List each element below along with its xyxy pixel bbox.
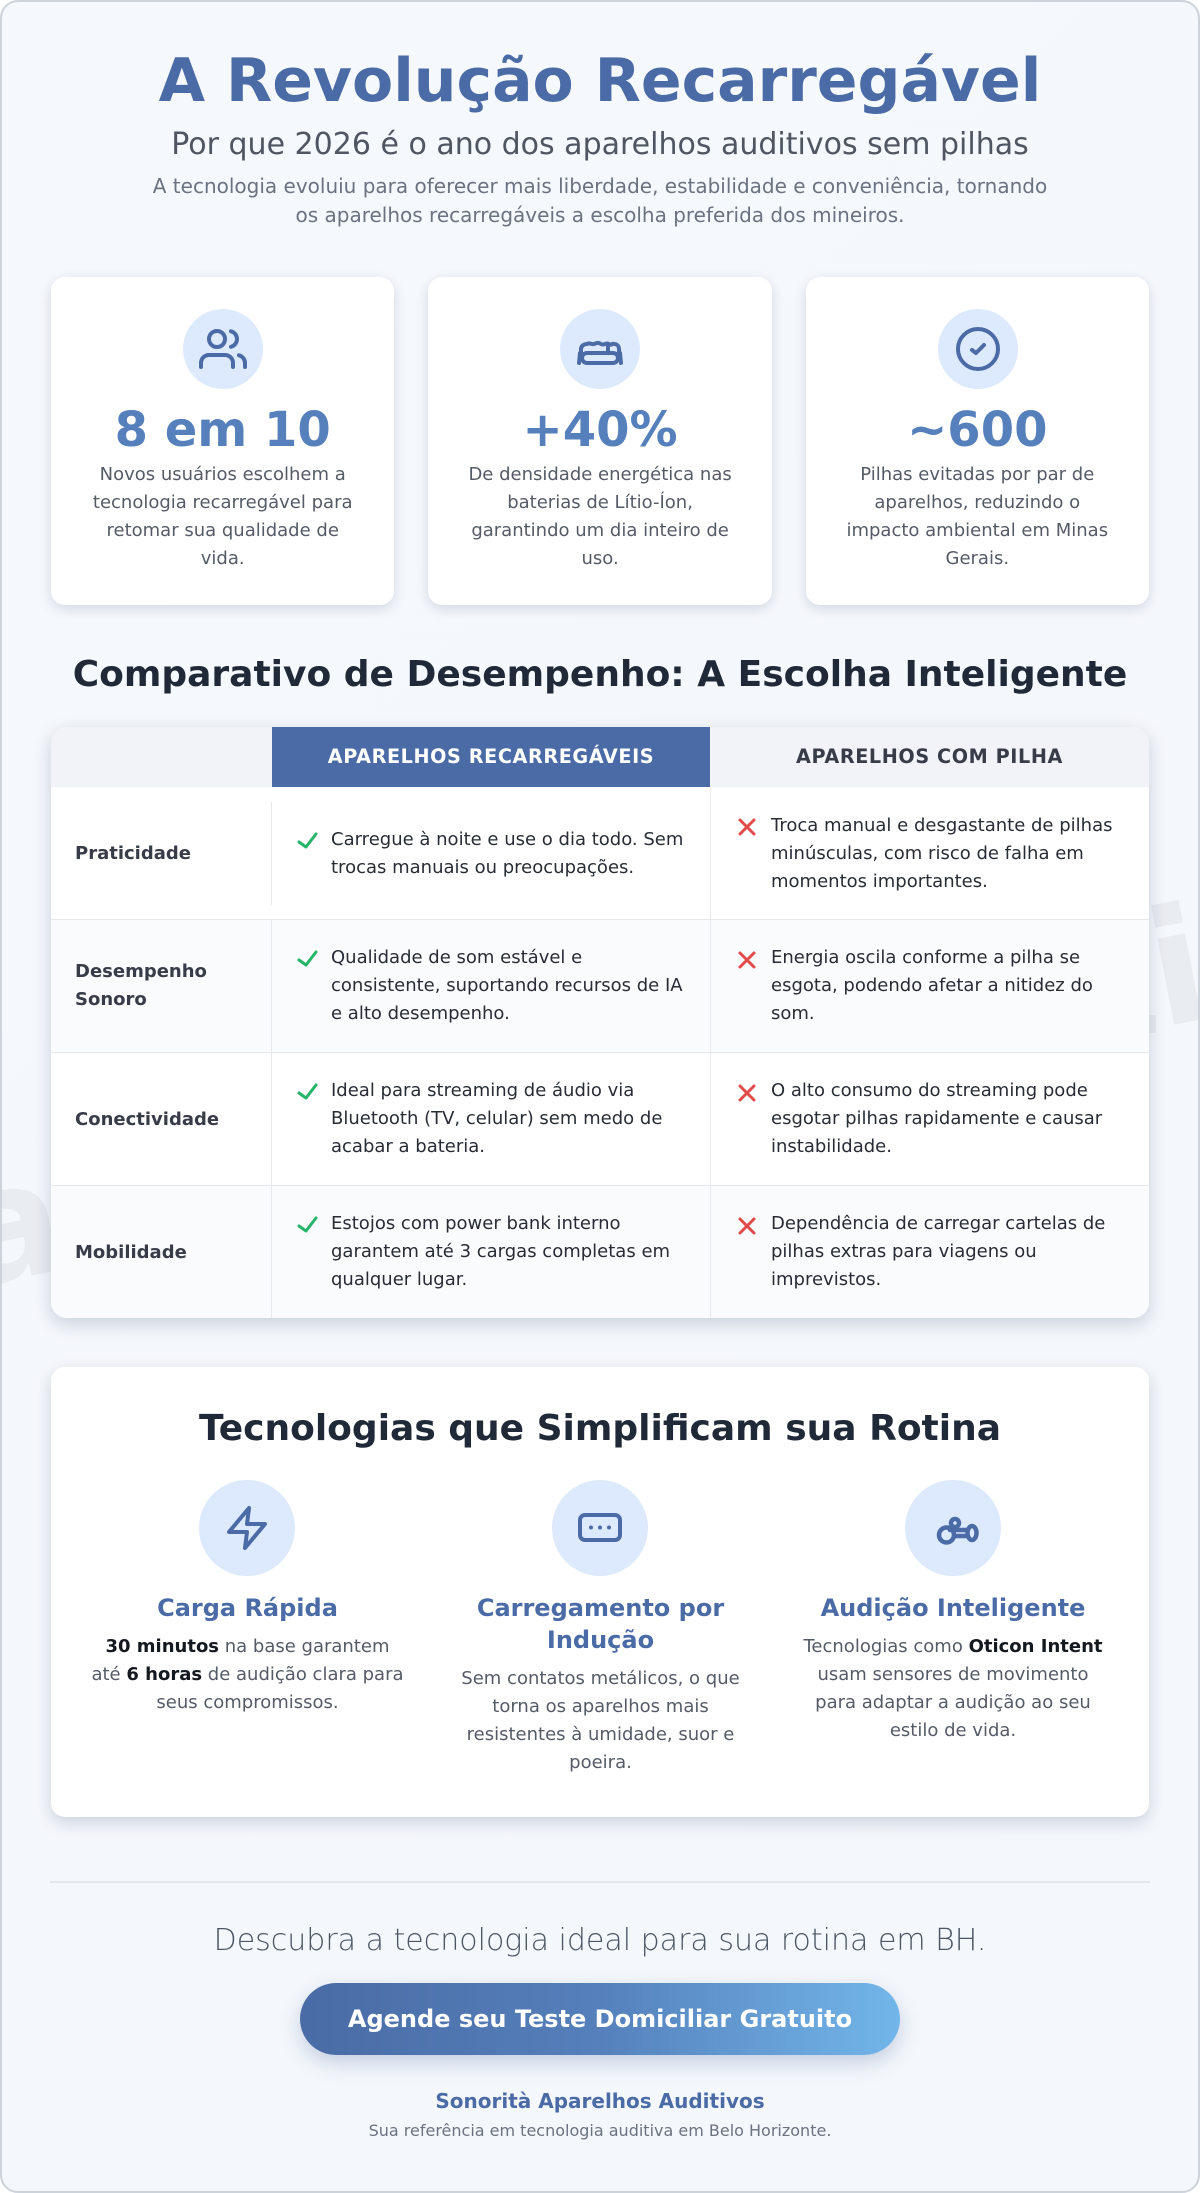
- stat card: +40%: [428, 277, 772, 605]
- icon: check: [297, 950, 318, 967]
- battery text: Troca manual e desgastante de pilhas: [771, 815, 1112, 836]
- icon: cross: [738, 951, 756, 969]
- intro text: os aparelhos recarregáveis a escolha preferida dos mineiros.: [296, 203, 904, 227]
- stat description: baterias de Lítio-Íon,: [507, 492, 693, 513]
- feature: Carga Rápida: [91, 1480, 404, 1713]
- stat description: De densidade energética nas: [468, 464, 732, 485]
- rechargeable text: Estojos com power bank interno: [331, 1213, 621, 1234]
- header: battery: APARELHOS COM PILHA: [796, 745, 1063, 768]
- icon: check: [297, 1216, 318, 1233]
- feature description: [461, 1668, 740, 1773]
- feature title: Indução: [547, 1626, 654, 1654]
- row label: Desempenho: [75, 961, 207, 982]
- battery text: [771, 1213, 1105, 1290]
- call to action text: Descubra a tecnologia ideal para sua rotina em BH.: [214, 1923, 986, 1958]
- stat number: +40%: [523, 402, 678, 458]
- icon: check: [297, 1083, 318, 1100]
- stat description: vida.: [201, 548, 245, 569]
- feature description: usam sensores de movimento: [817, 1664, 1088, 1685]
- rechargeable text: [331, 947, 683, 1024]
- feature description: 30 minutos na base garantem: [105, 1636, 390, 1657]
- feature description: estilo de vida.: [890, 1720, 1016, 1741]
- stat description: Pilhas evitadas por par de: [860, 464, 1094, 485]
- battery text: momentos importantes.: [771, 871, 988, 892]
- battery text: minúsculas, com risco de falha em: [771, 843, 1084, 864]
- intro text: A tecnologia evoluiu para oferecer mais liberdade, estabilidade e conveniência, tornando: [153, 174, 1047, 198]
- stat description: Novos usuários escolhem a: [100, 464, 346, 485]
- stat description: [846, 464, 1108, 569]
- feature description: poeira.: [569, 1752, 632, 1773]
- row label: Praticidade: [75, 843, 191, 864]
- feature description: [91, 1636, 404, 1713]
- feature description: torna os aparelhos mais: [492, 1696, 709, 1717]
- stat description: Gerais.: [946, 548, 1009, 569]
- feature title: Carregamento por: [477, 1594, 724, 1622]
- table header: [51, 727, 1149, 787]
- feature title: Audição Inteligente: [821, 1594, 1085, 1622]
- icon: check circle: [938, 309, 1018, 389]
- icon: battery: [560, 309, 640, 389]
- feature description: resistentes à umidade, suor e: [467, 1724, 734, 1745]
- stat description: impacto ambiental em Minas: [846, 520, 1108, 541]
- stat description: [468, 464, 732, 569]
- icon: cross: [738, 1084, 756, 1102]
- battery text: imprevistos.: [771, 1269, 881, 1290]
- rechargeable text: consistente, suportando recursos de IA: [331, 975, 683, 996]
- rechargeable text: [331, 1080, 662, 1157]
- row: Desempenho Sonoro: [51, 919, 1149, 1052]
- stat description: aparelhos, reduzindo o: [874, 492, 1080, 513]
- rechargeable text: Ideal para streaming de áudio via: [331, 1080, 634, 1101]
- rechargeable text: trocas manuais ou preocupações.: [331, 857, 634, 878]
- header: rechargeable: [272, 727, 710, 787]
- stat description: uso.: [581, 548, 619, 569]
- stat description: tecnologia recarregável para: [93, 492, 352, 513]
- icon: users: [183, 309, 263, 389]
- icon: charging pad: [552, 1480, 648, 1576]
- battery text: pilhas extras para viagens ou: [771, 1241, 1037, 1262]
- subtitle: Por que 2026 é o ano dos aparelhos auditivos sem pilhas: [171, 127, 1029, 162]
- row label: Conectividade: [75, 1109, 219, 1130]
- battery text: [771, 1080, 1102, 1157]
- row label: [75, 961, 207, 1010]
- row label: Mobilidade: [75, 1242, 187, 1263]
- panel heading: Tecnologias que Simplificam sua Rotina: [199, 1408, 1001, 1449]
- rechargeable text: acabar a bateria.: [331, 1136, 485, 1157]
- feature description: Sem contatos metálicos, o que: [461, 1668, 740, 1689]
- rechargeable text: e alto desempenho.: [331, 1003, 510, 1024]
- comparison table: [51, 727, 1149, 1318]
- battery text: instabilidade.: [771, 1136, 892, 1157]
- row label: Sonoro: [75, 989, 147, 1010]
- rechargeable text: Carregue à noite e use o dia todo. Sem: [331, 829, 683, 850]
- battery text: Energia oscila conforme a pilha se: [771, 947, 1080, 968]
- battery text: [771, 947, 1093, 1024]
- feature description: para adaptar a audição ao seu: [815, 1692, 1091, 1713]
- icon: check: [297, 832, 318, 849]
- stat card: ~600: [806, 277, 1149, 605]
- stat description: [93, 464, 352, 569]
- stat number: ~600: [907, 402, 1048, 458]
- comparison heading: Comparativo de Desempenho: A Escolha Inteligente: [73, 654, 1127, 695]
- rechargeable text: [331, 829, 683, 878]
- icon: cross: [738, 1217, 756, 1235]
- battery text: esgota, podendo afetar a nitidez do: [771, 975, 1093, 996]
- icon: bolt: [199, 1480, 295, 1576]
- row: Mobilidade: [51, 1185, 1149, 1318]
- stat card: 8 em 10: [51, 277, 394, 605]
- icon: cross: [738, 818, 756, 836]
- header: rechargeable: APARELHOS RECARREGÁVEIS: [328, 745, 654, 768]
- rechargeable text: Qualidade de som estável e: [331, 947, 582, 968]
- brand name: Sonorità Aparelhos Auditivos: [435, 2089, 765, 2113]
- battery text: esgotar pilhas rapidamente e causar: [771, 1108, 1102, 1129]
- stat description: garantindo um dia inteiro de: [471, 520, 729, 541]
- panel: technologies: [51, 1367, 1149, 1817]
- rechargeable text: [331, 1213, 670, 1290]
- feature: Audição Inteligente: [803, 1480, 1102, 1741]
- call to action button: Agende seu Teste Domiciliar Gratuito: [348, 2005, 852, 2033]
- feature description: Tecnologias como Oticon Intent: [803, 1636, 1102, 1657]
- title: A Revolução Recarregável: [159, 46, 1041, 116]
- call to action button: [300, 1983, 900, 2055]
- row: Conectividade: [51, 1052, 1149, 1185]
- rechargeable text: Bluetooth (TV, celular) sem medo de: [331, 1108, 662, 1129]
- rechargeable text: qualquer lugar.: [331, 1269, 467, 1290]
- rechargeable text: garantem até 3 cargas completas em: [331, 1241, 670, 1262]
- feature: Carregamento por Indução: [461, 1480, 740, 1773]
- battery text: Dependência de carregar cartelas de: [771, 1213, 1105, 1234]
- feature title: [477, 1594, 724, 1654]
- feature description: seus compromissos.: [156, 1692, 339, 1713]
- feature title: Carga Rápida: [157, 1594, 338, 1622]
- battery text: [770, 815, 1112, 892]
- feature description: até 6 horas de audição clara para: [91, 1664, 404, 1685]
- battery text: som.: [771, 1003, 815, 1024]
- feature description: [803, 1636, 1102, 1741]
- row: Praticidade: [75, 787, 1112, 919]
- stat number: 8 em 10: [115, 402, 331, 458]
- intro text: [153, 174, 1047, 227]
- brand tagline: Sua referência em tecnologia auditiva em Belo Horizonte.: [369, 2121, 831, 2140]
- battery text: O alto consumo do streaming pode: [771, 1080, 1088, 1101]
- stat description: retomar sua qualidade de: [106, 520, 339, 541]
- icon: hearing aids: [905, 1480, 1001, 1576]
